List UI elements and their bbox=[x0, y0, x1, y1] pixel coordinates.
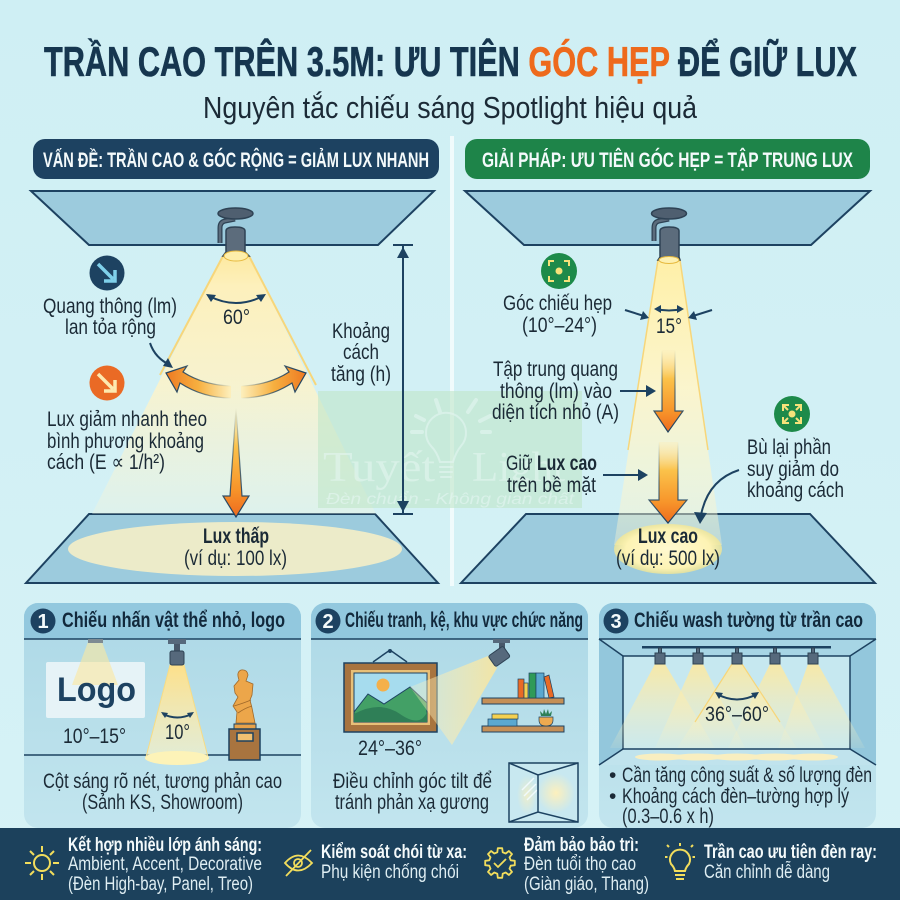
solution heading bbox=[465, 139, 870, 179]
compensate text: suy giảm do bbox=[747, 458, 839, 481]
distance text: Khoảng bbox=[332, 320, 390, 343]
framed painting bbox=[344, 649, 437, 732]
floor glow bbox=[635, 754, 838, 760]
card background bbox=[599, 603, 876, 828]
number badge 2: 2 bbox=[322, 611, 334, 633]
panel: solution bbox=[461, 191, 875, 583]
card description: • bbox=[609, 785, 616, 808]
distance text: cách bbox=[343, 341, 379, 364]
card description: Điều chỉnh góc tilt để bbox=[333, 770, 492, 793]
card description: Cột sáng rõ nét, tương phản cao bbox=[43, 770, 282, 793]
number badge 1 bbox=[30, 608, 56, 634]
logo sign bbox=[46, 639, 145, 718]
card description: tránh phản xạ gương bbox=[335, 791, 489, 814]
room perspective bbox=[599, 639, 876, 765]
flux text: lan tỏa rộng bbox=[65, 316, 156, 339]
watermark: Light bbox=[472, 445, 565, 491]
narrow angle text: Góc chiếu hẹp bbox=[503, 292, 612, 315]
concentrate text: diện tích nhỏ (A) bbox=[492, 401, 619, 424]
tip: layers: (Đèn High-bay, Panel, Treo) bbox=[68, 874, 253, 895]
lux decrease text: bình phương khoảng bbox=[47, 430, 204, 453]
number badge 1: 1 bbox=[37, 611, 49, 633]
distance text: tăng (h) bbox=[331, 363, 391, 386]
compensate text: Bù lại phần bbox=[747, 436, 831, 459]
tip: maintenance: Đảm bảo bảo trì: bbox=[524, 835, 639, 856]
small fixture bbox=[168, 639, 186, 665]
floor bbox=[461, 514, 875, 583]
compensate pointer bbox=[694, 470, 739, 524]
subtitle: Nguyên tắc chiếu sáng Spotlight hiệu quả bbox=[203, 90, 698, 125]
lux decrease text: Lux giảm nhanh theo bbox=[47, 408, 207, 431]
keep lux text: trên bề mặt bbox=[507, 474, 596, 497]
panel: problem annotations bbox=[43, 208, 413, 570]
high lux pool bbox=[614, 524, 722, 574]
mirror corner diagram bbox=[509, 763, 578, 822]
number badge 3: 3 bbox=[610, 611, 622, 633]
wall floor line bbox=[24, 754, 301, 756]
high lux label bbox=[616, 525, 720, 570]
angle label: 15° bbox=[656, 315, 682, 338]
problem floor bbox=[26, 514, 438, 583]
high lux label: (ví dụ: 500 lx) bbox=[616, 547, 720, 570]
ceiling bbox=[465, 191, 870, 245]
angle arc bbox=[206, 294, 266, 303]
problem ceiling bbox=[31, 191, 434, 245]
card 3: wall wash bbox=[599, 603, 876, 828]
low lux label: Lux thấp bbox=[203, 525, 269, 548]
card description: (Sảnh KS, Showroom) bbox=[82, 791, 243, 814]
icon: light bulb bbox=[665, 843, 695, 879]
card description bbox=[609, 764, 872, 828]
lower down arrow bbox=[649, 442, 687, 523]
title: TRẦN CAO TRÊN 3.5M: ƯU TIÊN GÓC HẸP ĐỂ GIỮ LUX bbox=[44, 37, 857, 85]
low lux label: (ví dụ: 100 lx) bbox=[184, 547, 287, 570]
card background bbox=[311, 603, 588, 828]
high lux label: Lux cao bbox=[638, 525, 698, 548]
track with fixtures bbox=[642, 646, 831, 664]
card 1: accent lighting bbox=[24, 603, 301, 828]
angle label: 60° bbox=[223, 306, 250, 329]
problem floor light pool bbox=[68, 522, 402, 576]
painting angle: 24°–36° bbox=[358, 737, 422, 760]
keep lux text: Giữ Lux cao bbox=[506, 452, 597, 475]
tip: layers: Ambient, Accent, Decorative bbox=[68, 854, 262, 875]
logo angle: 10°–15° bbox=[63, 725, 126, 748]
watermark: Đèn chuẩn - Không gian chất bbox=[326, 490, 575, 508]
wash angle: 36°–60° bbox=[705, 703, 769, 726]
spreading arrows bbox=[166, 366, 306, 398]
icon: eye crossed bbox=[285, 850, 312, 876]
card heading: Chiếu tranh, kệ, khu vực chức năng bbox=[345, 609, 583, 632]
card background bbox=[24, 603, 301, 828]
tip: glare: Kiểm soát chói từ xa: bbox=[321, 842, 467, 863]
light beam 60 degrees bbox=[92, 255, 376, 514]
icon: lux decreasing bbox=[90, 366, 124, 400]
upper down arrow bbox=[654, 350, 683, 432]
tip: glare: Phụ kiện chống chói bbox=[321, 862, 459, 883]
card description bbox=[333, 770, 492, 814]
concentrate text: Tập trung quang bbox=[493, 358, 618, 381]
concentrate pointer bbox=[620, 385, 656, 397]
compensate text bbox=[747, 436, 844, 502]
icon: expand bbox=[774, 396, 810, 432]
watermark: Tuyết bbox=[323, 445, 435, 491]
tip: layers bbox=[68, 835, 262, 895]
icon: narrow focus bbox=[541, 253, 577, 289]
card 2: painting and shelf lighting bbox=[311, 603, 588, 828]
distance text bbox=[331, 320, 391, 386]
card heading: Chiếu nhấn vật thể nhỏ, logo bbox=[62, 609, 285, 632]
problem heading bbox=[33, 139, 439, 179]
leader arrow bbox=[150, 343, 173, 368]
narrow angle text: (10°–24°) bbox=[522, 314, 597, 337]
low lux label bbox=[184, 525, 287, 570]
downward arrow bbox=[223, 408, 249, 517]
compensate text: khoảng cách bbox=[747, 479, 844, 502]
concentrate text bbox=[492, 358, 619, 424]
flux text bbox=[43, 295, 177, 339]
flux text: Quang thông (lm) bbox=[43, 295, 177, 318]
tilted fixture bbox=[488, 639, 510, 667]
tip: track lights: Căn chỉnh dễ dàng bbox=[704, 861, 830, 883]
tip: glare bbox=[321, 842, 467, 883]
card description: • bbox=[609, 764, 616, 787]
shelves bbox=[482, 673, 564, 732]
icon: flux spreading bbox=[90, 256, 124, 290]
arc bbox=[715, 692, 759, 700]
tip: maintenance: (Giàn giáo, Thang) bbox=[524, 874, 649, 895]
card description: (0.3–0.6 x h) bbox=[622, 805, 714, 828]
number badge 2 bbox=[316, 608, 340, 634]
concentrate text: thông (lm) vào bbox=[500, 380, 612, 403]
lux decrease text bbox=[47, 408, 207, 474]
spotlight fixture bbox=[652, 208, 686, 264]
tilted beam bbox=[410, 656, 497, 745]
number badge 3 bbox=[604, 608, 628, 634]
keep lux text bbox=[506, 452, 597, 497]
wash beams bbox=[610, 664, 865, 748]
icon: sun bbox=[25, 846, 59, 880]
lux decrease text: cách (E ∝ 1/h²) bbox=[47, 451, 165, 474]
keep lux pointer bbox=[603, 469, 648, 481]
logo sign: Logo bbox=[57, 671, 136, 709]
icon: gear check bbox=[485, 848, 515, 878]
statue bbox=[229, 670, 260, 760]
tip: track lights bbox=[704, 842, 877, 883]
narrow beam bbox=[614, 260, 722, 545]
distance dimension bbox=[393, 245, 413, 514]
problem heading: VẤN ĐỀ: TRẦN CAO & GÓC RỘNG = GIẢM LUX NHANH bbox=[43, 148, 429, 172]
watermark bbox=[318, 391, 582, 508]
card description bbox=[43, 770, 282, 814]
tip: maintenance bbox=[524, 835, 649, 895]
angle arrows bbox=[625, 305, 712, 320]
spotlight fixture bbox=[218, 208, 253, 261]
arc bbox=[161, 712, 194, 718]
narrow angle text bbox=[503, 292, 612, 337]
beam 10 degrees bbox=[145, 665, 209, 765]
tip: layers: Kết hợp nhiều lớp ánh sáng: bbox=[68, 835, 262, 856]
angle: 10° bbox=[165, 721, 190, 744]
footer band bbox=[0, 828, 900, 900]
tip: maintenance: Đèn tuổi thọ cao bbox=[524, 854, 636, 875]
